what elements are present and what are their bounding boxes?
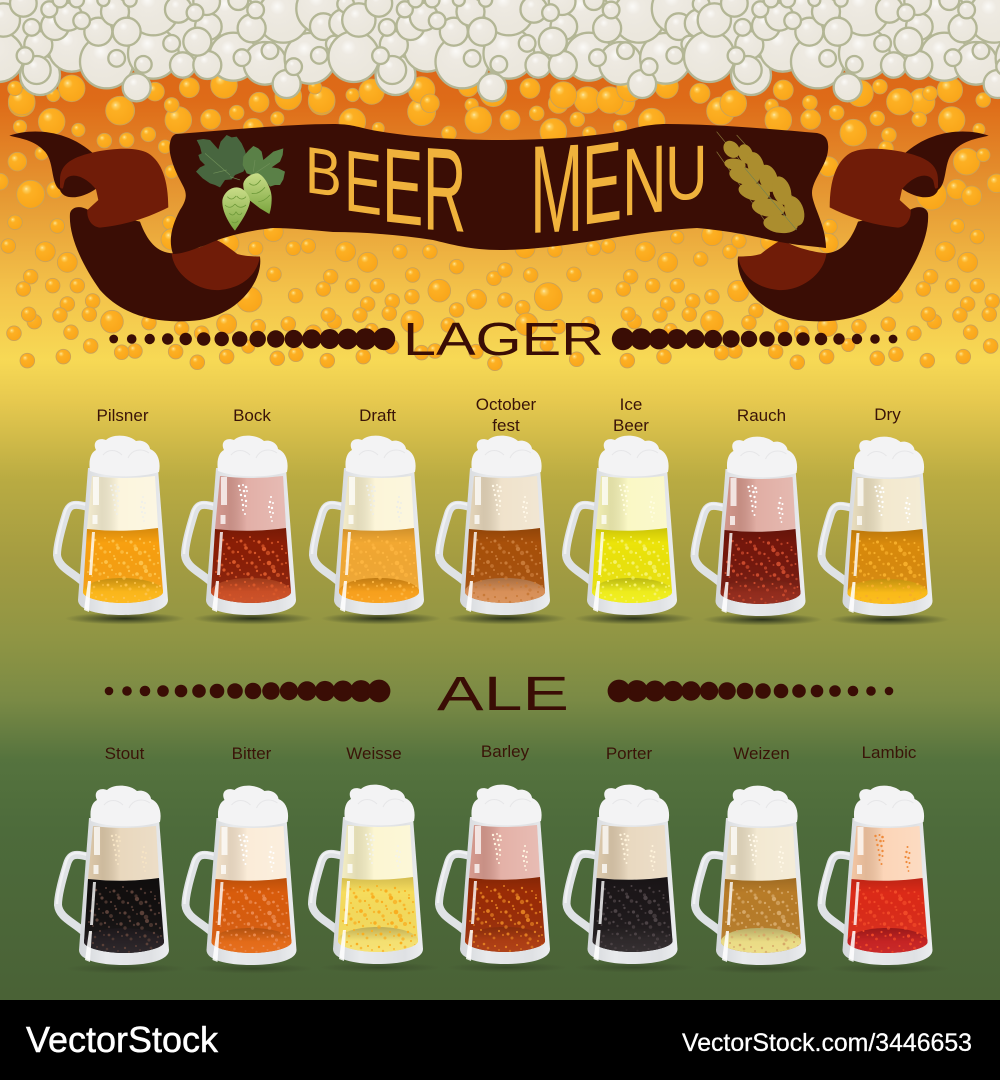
ale labels bbox=[105, 742, 917, 763]
lager labels: Rauch bbox=[737, 406, 786, 425]
mug: Dry bbox=[820, 437, 950, 626]
title: BEER MENU: M bbox=[530, 118, 583, 261]
mug: Rauch bbox=[694, 437, 822, 626]
title: BEER MENU: B bbox=[305, 133, 342, 211]
title: BEER MENU: N bbox=[622, 126, 667, 237]
lager labels bbox=[97, 395, 901, 435]
ale labels: Stout bbox=[105, 744, 145, 763]
foam: top layer of white bubbles bbox=[0, 0, 1000, 101]
ale labels: Lambic bbox=[862, 743, 917, 762]
title: BEER MENU bbox=[305, 118, 708, 261]
ribbon: main band bbox=[169, 124, 828, 254]
dotted rule: left of LAGER bbox=[109, 328, 395, 350]
lager labels: October bbox=[476, 395, 537, 414]
title: BEER MENU: E bbox=[582, 118, 622, 250]
ale labels: Weisse bbox=[346, 744, 402, 763]
footer bar bbox=[0, 1000, 1000, 1080]
mug: Stout bbox=[57, 786, 186, 974]
title: BEER MENU: R bbox=[423, 122, 466, 257]
ribbon: left curl bbox=[9, 131, 260, 321]
ALE label: ALE bbox=[437, 668, 569, 721]
lager labels: Draft bbox=[359, 406, 396, 425]
mug: Porter bbox=[566, 785, 694, 972]
title: BEER MENU: E bbox=[382, 126, 423, 249]
background: beer bubbles bbox=[0, 72, 1000, 371]
title: BEER MENU: U bbox=[665, 129, 708, 217]
ribbon: right curl bbox=[738, 131, 989, 321]
icon: hop leaves and cones bbox=[196, 135, 285, 231]
lager mugs row bbox=[56, 436, 950, 626]
mug: Weisse bbox=[311, 785, 440, 972]
icon: wheat ear bbox=[717, 132, 808, 235]
mug: Lambic bbox=[820, 786, 950, 974]
lager labels: Ice bbox=[620, 395, 642, 414]
lager labels: Pilsner bbox=[97, 406, 149, 425]
footer: image reference: VectorStock.com/3446653 bbox=[682, 1029, 972, 1057]
LAGER label: LAGER bbox=[403, 313, 604, 365]
mug: Bock bbox=[184, 436, 313, 624]
ale labels: Weizen bbox=[733, 744, 790, 763]
mug: Ice Beer bbox=[565, 436, 694, 624]
mug: Weizen bbox=[694, 786, 823, 974]
ribbon banner bbox=[9, 118, 989, 321]
dotted rule: left of ALE bbox=[105, 680, 390, 702]
mug: October fest bbox=[438, 436, 567, 624]
mug: Pilsner bbox=[56, 436, 185, 624]
dotted rule: right of ALE bbox=[608, 680, 893, 702]
heading: ALE with dotted rules bbox=[105, 668, 893, 721]
ale labels: Porter bbox=[606, 744, 652, 763]
lager labels: Bock bbox=[233, 406, 271, 425]
heading: LAGER with dotted rules bbox=[109, 313, 897, 365]
ale labels: Barley bbox=[481, 742, 530, 761]
ale labels: Bitter bbox=[232, 744, 272, 763]
title: BEER MENU: E bbox=[344, 131, 382, 234]
mug: Bitter bbox=[184, 786, 314, 974]
dotted rule: right of LAGER bbox=[612, 328, 897, 350]
footer: brand: VectorStock bbox=[26, 1019, 219, 1060]
lager labels: Beer bbox=[613, 416, 649, 435]
ale mugs row bbox=[57, 785, 950, 974]
lager labels: Dry bbox=[874, 405, 901, 424]
lager labels: fest bbox=[492, 416, 520, 435]
mug: Draft bbox=[312, 436, 441, 624]
mug: Barley bbox=[438, 785, 567, 972]
